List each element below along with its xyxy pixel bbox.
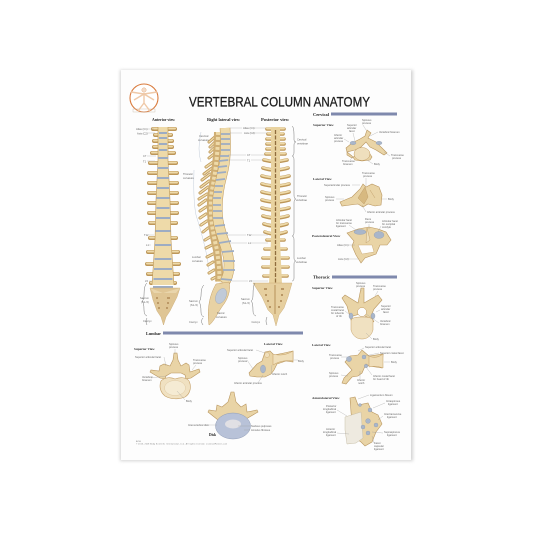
lumbar superior view: Body [186, 399, 193, 403]
thoracic anterolateral view: ligament [374, 447, 384, 451]
lumbar lateral view: Superior articular facet [227, 348, 253, 352]
cervical superior view: Transverse [342, 159, 355, 163]
heading: anterior view: Anterior view [152, 117, 175, 122]
cervical superior view: Spinous [362, 118, 372, 122]
labels: lateral spine: Cervical [199, 134, 209, 138]
cervical posterolateral view: Dens [365, 217, 372, 221]
cervical lateral view: Transverse [362, 171, 375, 175]
labels: posterior spine: Sacrum [241, 297, 250, 301]
cervical superior view: process [392, 156, 402, 160]
thoracic lateral view: Inferior [357, 378, 365, 382]
lumbar superior view: process [169, 345, 179, 349]
lumbar superior view: process [193, 361, 203, 365]
lumbar lateral view: Spinous [238, 356, 248, 360]
thoracic lateral view: Transverse [329, 353, 342, 357]
panel: posterior view [241, 117, 309, 326]
thoracic lateral view: process [330, 356, 340, 360]
labels: anterior spine: Sacrum [140, 296, 149, 300]
cervical posterolateral view: ligament [336, 224, 346, 228]
panel: cervical [312, 112, 404, 263]
labels: posterior spine: vertebrae [297, 142, 309, 146]
lumbar disk [188, 392, 272, 439]
thoracic superior view: costal facet [331, 308, 344, 312]
heading: right lateral view: Right lateral view [207, 117, 240, 122]
labels: lateral spine: Lumbar [192, 255, 201, 259]
cervical superior view: Body [374, 162, 381, 166]
cervical posterolateral view: Articular facet [382, 219, 398, 223]
panel: centre level labels: L1 [248, 241, 251, 245]
cervical lateral view [313, 171, 396, 214]
cervical superior view: articular [347, 126, 356, 130]
cervical posterolateral view: process [365, 220, 375, 224]
thoracic anterolateral view: capsular [374, 444, 384, 448]
labels: lateral spine: curvature [198, 138, 209, 142]
lumbar superior view: Vertebral [142, 375, 153, 379]
cervical superior view: Vertebral foramen [379, 130, 400, 134]
lumbar disk: Nucleus pulposus [251, 424, 272, 428]
labels: anterior spine: L5 [145, 279, 148, 283]
labels: posterior spine [241, 126, 309, 325]
thoracic superior view: Transverse [373, 284, 386, 288]
thoracic anterolateral view: Anterolateral View [312, 396, 340, 400]
thoracic superior view: foramen [380, 322, 390, 326]
cervical superior view: Superior [347, 123, 357, 127]
bar: lumbar [163, 332, 303, 334]
thoracic anterolateral view: ligament [326, 433, 336, 437]
thoracic anterolateral view: ligament [388, 402, 398, 406]
labels: posterior spine: Thoracic [297, 194, 308, 198]
lumbar superior view: Transverse [193, 358, 206, 362]
labels: posterior spine: Cervical [297, 138, 307, 142]
thoracic anterolateral view: longitudinal [323, 430, 337, 434]
curvature guide lines [194, 132, 209, 270]
cervical posterolateral view [312, 217, 398, 263]
cervical superior view: Superior View [313, 123, 334, 127]
labels: anterior spine: Coccyx [143, 319, 152, 323]
labels: lateral spine: (S1–5) [190, 303, 198, 307]
thoracic anterolateral view: Supraspinous [384, 430, 401, 434]
cervical superior view: process [334, 139, 344, 143]
labels: anterior spine: C7 [143, 154, 147, 158]
heading: cervical: Cervical [313, 112, 330, 117]
spine: posterior [253, 127, 292, 326]
lumbar superior view: foramen [142, 378, 152, 382]
thoracic anterolateral view: ligament [387, 433, 397, 437]
panel: centre level labels [226, 126, 268, 283]
poster shadow [120, 70, 413, 461]
thoracic anterolateral view: longitudinal [323, 407, 337, 411]
thoracic lateral view: Body [391, 360, 398, 364]
lumbar lateral view: process [238, 359, 248, 363]
labels: posterior spine: Coccyx [251, 320, 261, 324]
panel: centre level labels: Atlas (C1) [243, 126, 255, 130]
cervical posterolateral view: Atlas (C1) [337, 243, 349, 247]
cervical superior view: Inferior [334, 133, 342, 137]
thoracic lateral view: notch [358, 381, 365, 385]
panel: centre level labels: T12 [247, 233, 252, 237]
thoracic superior view: Superior [381, 304, 391, 308]
lumbar lateral view: Lateral View [264, 342, 283, 346]
lumbar lateral view: Inferior articular process [234, 381, 263, 385]
thoracic superior view: Transverse [331, 305, 344, 309]
thoracic superior view: Body [373, 337, 380, 341]
labels: anterior spine: L1 [146, 243, 149, 247]
bar: cervical [331, 112, 397, 116]
cervical posterolateral view: for transverse [336, 221, 352, 225]
cervical lateral view: Body [388, 197, 395, 201]
labels: lateral spine [183, 134, 227, 325]
panel: centre level labels: T1 [247, 158, 251, 162]
thoracic lateral view: Spinous [329, 371, 339, 375]
thoracic anterolateral view [312, 393, 402, 451]
bar: thoracic [332, 276, 397, 278]
lumbar superior view: Superior View [134, 347, 155, 351]
heading: lumbar: Lumbar [146, 331, 161, 336]
thoracic superior view: process [373, 287, 383, 291]
panel: right lateral view [183, 117, 240, 325]
thoracic superior view: Superior View [312, 286, 333, 290]
labels: lateral spine: curvature [216, 315, 227, 319]
cervical posterolateral view: Articular facet [336, 218, 352, 222]
cervical lateral view: process [363, 174, 373, 178]
labels: anterior spine: T1 [143, 160, 147, 164]
labels: lateral spine: Thoracic [183, 172, 194, 176]
icon: Vitruvian man logo [130, 84, 158, 112]
labels: anterior spine: Axis (C2) [137, 132, 148, 136]
cervical superior view: facet [349, 129, 355, 133]
panel: centre level labels: C7 [247, 153, 251, 157]
thoracic anterolateral view: ligament [326, 410, 336, 414]
thoracic anterolateral view: Ligamentum flavum [370, 393, 393, 397]
thoracic lateral view: Superior costal facet [380, 351, 404, 355]
cervical superior view [313, 118, 404, 166]
cervical posterolateral view: Posterolateral View [312, 234, 341, 238]
heading: thoracic: Thoracic [313, 274, 330, 280]
footer credit: BVCA [136, 440, 141, 443]
cervical lateral view: Superarticular process [324, 183, 351, 187]
lumbar disk: Disk [209, 433, 216, 437]
panel: anterior view [136, 117, 180, 325]
panel: lumbar [134, 331, 305, 439]
labels: anterior spine: Atlas (C1) [136, 127, 148, 131]
spine: anterior [147, 127, 180, 325]
thoracic superior view: process [356, 284, 366, 288]
panel: centre level labels: Axis (C2) [244, 131, 255, 135]
labels: anterior spine: (S1–5) [141, 300, 149, 304]
labels: lateral spine: Sacral [217, 311, 225, 315]
cervical superior view: process [362, 121, 372, 125]
heading: posterior view: Posterior view [261, 117, 289, 122]
spine: lateral [199, 128, 235, 325]
lumbar lateral view: Inferior notch [272, 372, 288, 376]
labels: lateral spine: Sacrum [189, 299, 198, 303]
thoracic lateral view: Lateral View [312, 343, 331, 347]
thoracic superior view: Vertebral [380, 319, 391, 323]
lumbar lateral view [227, 342, 305, 385]
lumbar superior view [134, 342, 206, 403]
thoracic superior view [312, 281, 391, 341]
lumbar superior view: Superior articular facet [135, 355, 161, 359]
labels: lateral spine: curvature [183, 176, 194, 180]
thoracic lateral view: for head of rib [373, 377, 390, 381]
thoracic superior view: Spinous [356, 281, 366, 285]
thoracic superior view: for tubercle [331, 311, 345, 315]
lumbar lateral view: Body [298, 359, 305, 363]
panel: thoracic [312, 274, 404, 451]
poster sheet [121, 70, 411, 460]
title: VERTEBRAL COLUMN ANATOMY [189, 94, 371, 110]
cervical superior view: articular [334, 136, 343, 140]
cervical lateral view: Lateral View [313, 177, 332, 181]
panel: centre level labels: L5 [249, 279, 252, 283]
labels: posterior spine: vertebrae [296, 198, 308, 202]
footer credit [136, 440, 228, 446]
thoracic lateral view: Inferior costal facet [373, 374, 395, 378]
thoracic anterolateral view: Intertransverse [384, 412, 402, 416]
lumbar disk: Intervertebral disk [188, 423, 209, 427]
lumbar superior view: Spinous [169, 342, 179, 346]
thoracic lateral view: Superior articular facet [365, 345, 391, 349]
thoracic anterolateral view: ligament [387, 415, 397, 419]
cervical lateral view: Spinous [325, 195, 335, 199]
thoracic anterolateral view: Facet [374, 441, 381, 445]
labels: anterior spine [136, 127, 156, 325]
cervical lateral view: Inferior articular process [367, 210, 396, 214]
thoracic anterolateral view: Posterior [326, 404, 337, 408]
footer credit: © 2013, 2018 Body Scientific International, LLC. All rights reserved. LicensedPosters.com [136, 442, 228, 446]
labels: anterior spine: T12 [144, 233, 149, 237]
cervical posterolateral view: Axis (C2) [338, 257, 349, 261]
cervical lateral view: process [325, 198, 335, 202]
labels: posterior spine: Lumbar [297, 256, 306, 260]
lumbar disk: Annulus fibrosus [251, 428, 271, 432]
thoracic lateral view [312, 343, 404, 385]
labels: lateral spine: curvature [192, 259, 203, 263]
cervical superior view: foramen [343, 162, 353, 166]
thoracic superior view: articular [381, 307, 390, 311]
cervical posterolateral view: condyle [382, 225, 391, 229]
thoracic superior view: facet [383, 310, 389, 314]
labels: posterior spine: (S1–5) [242, 301, 250, 305]
thoracic lateral view: process [329, 374, 339, 378]
cervical superior view: Transverse [391, 153, 404, 157]
labels: posterior spine: vertebrae [296, 260, 308, 264]
thoracic anterolateral view: Anterior [326, 427, 335, 431]
labels: lateral spine: Coccyx [189, 320, 198, 324]
thoracic anterolateral view: Intraspinous [386, 399, 401, 403]
cervical posterolateral view: for occipital [382, 222, 396, 226]
thoracic superior view: of rib [336, 314, 342, 318]
